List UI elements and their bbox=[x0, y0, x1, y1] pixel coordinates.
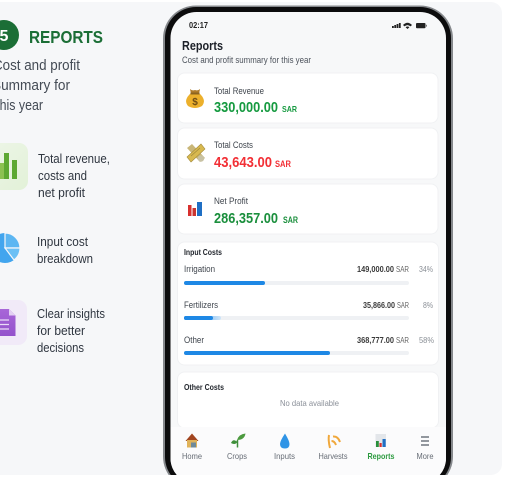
feature text bbox=[37, 234, 93, 266]
card: total costs: SAR bbox=[275, 159, 291, 169]
card: total revenue: SAR bbox=[282, 104, 297, 114]
feature text: Total revenue, bbox=[38, 151, 110, 166]
feature text: net profit bbox=[38, 185, 85, 200]
feature text: breakdown bbox=[37, 251, 93, 266]
card: net profit: 286,357.00 bbox=[214, 210, 278, 227]
status bar bbox=[189, 22, 427, 29]
card: net profit: SAR bbox=[283, 215, 298, 225]
nav: home bbox=[182, 434, 202, 459]
row: other: 58% bbox=[419, 335, 434, 345]
feature: input cost breakdown bbox=[0, 233, 93, 266]
feature: clear insights bbox=[0, 300, 105, 355]
phone frame bbox=[163, 6, 453, 484]
feature text: Input cost bbox=[37, 234, 88, 249]
row: other: SAR bbox=[396, 336, 409, 345]
feature text: decisions bbox=[37, 340, 84, 355]
nav: home: Home bbox=[182, 451, 202, 461]
screen title: Reports bbox=[182, 39, 223, 53]
row: other: 368,777.00 bbox=[357, 335, 394, 345]
left column: heading and features bbox=[0, 20, 110, 355]
nav: harvests: Harvests bbox=[318, 451, 348, 461]
row: fertilizers: 8% bbox=[423, 300, 433, 310]
row: irrigation: SAR bbox=[396, 265, 409, 274]
row: fertilizers: SAR bbox=[397, 301, 409, 310]
phone mockup bbox=[163, 6, 453, 484]
row: irrigation bbox=[184, 264, 433, 285]
nav: crops bbox=[227, 434, 247, 461]
feature text bbox=[38, 151, 110, 200]
row: fertilizers bbox=[184, 300, 433, 320]
card: total costs: 43,643.00 bbox=[214, 154, 272, 171]
row: fertilizers: Fertilizers bbox=[184, 300, 218, 310]
nav: reports bbox=[368, 434, 395, 461]
row: irrigation: 149,000.00 bbox=[357, 264, 394, 274]
description bbox=[0, 58, 80, 114]
card: input costs bbox=[184, 249, 434, 355]
icon: pie chart bbox=[0, 233, 20, 263]
screen subtitle: Cost and profit summary for this year bbox=[182, 55, 311, 65]
nav: reports: Reports bbox=[368, 451, 395, 461]
nav: inputs: Inputs bbox=[274, 451, 295, 461]
feature text: for better bbox=[37, 323, 86, 338]
nav: more: More bbox=[416, 451, 434, 461]
card: net profit bbox=[188, 198, 298, 226]
icon: money bag: $ bbox=[192, 97, 198, 108]
feature text: costs and bbox=[38, 168, 87, 183]
title: REPORTS bbox=[29, 27, 103, 47]
card: other costs: Other Costs bbox=[184, 382, 224, 392]
bottom navigation bbox=[170, 427, 446, 475]
row: other: Other bbox=[184, 335, 204, 345]
feature: revenue, costs, profit bbox=[0, 143, 110, 200]
icon: money bills bbox=[187, 144, 205, 162]
card: other costs: No data available bbox=[280, 398, 339, 408]
nav: more bbox=[416, 437, 434, 461]
card: other costs bbox=[184, 384, 339, 406]
row: irrigation: Irrigation bbox=[184, 264, 215, 274]
nav: harvests bbox=[318, 435, 348, 461]
status bar: 02:17 bbox=[189, 20, 208, 30]
status icons bbox=[392, 23, 427, 29]
card: net profit: Net Profit bbox=[214, 196, 248, 206]
nav: inputs bbox=[274, 434, 295, 461]
step number badge bbox=[0, 20, 19, 50]
phone screen bbox=[170, 12, 446, 484]
card: total revenue: Total Revenue bbox=[214, 86, 264, 96]
feature text bbox=[37, 306, 105, 355]
row: fertilizers: 35,866.00 bbox=[363, 300, 395, 310]
icon: green bar chart bbox=[0, 143, 28, 190]
card: total revenue: 330,000.00 bbox=[214, 99, 278, 116]
row: other bbox=[184, 335, 434, 355]
card: input costs: Input Costs bbox=[184, 247, 222, 257]
icon: bar chart bbox=[188, 202, 202, 216]
card: total costs: Total Costs bbox=[214, 140, 253, 150]
icon: purple document bbox=[0, 300, 27, 345]
icon: money bag bbox=[186, 89, 204, 108]
feature text: Clear insights bbox=[37, 306, 105, 321]
nav: crops: Crops bbox=[227, 451, 247, 461]
card: total revenue bbox=[186, 88, 297, 114]
card: total costs bbox=[186, 142, 291, 170]
row: irrigation: 34% bbox=[419, 264, 433, 274]
